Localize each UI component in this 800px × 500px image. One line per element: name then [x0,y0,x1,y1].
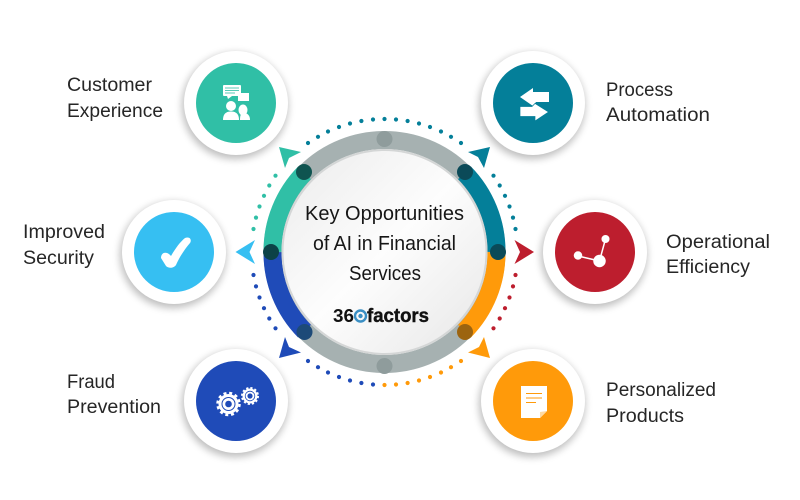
icon: gears [218,388,258,415]
panel: fraud prevention [67,349,288,457]
label: personalized products: Personalized [606,380,716,401]
dotted ring: personalized products [382,359,463,387]
label: operational efficiency: Operational [666,232,770,253]
dotted ring: process automation [382,117,518,231]
logo: 360 factors [333,306,429,327]
dotted ring: operational efficiency [491,273,518,330]
label: improved security: Improved [23,222,105,243]
label: customer experience: Experience [67,101,163,122]
center title: of AI in Financial [313,233,456,255]
arrow: operational efficiency [514,240,534,264]
label: fraud prevention: Prevention [67,397,161,418]
ring segment: process automation [464,173,497,252]
icon: connected nodes [574,236,609,266]
ring segment: customer experience [272,173,304,252]
logo: 360 factors: factors [367,306,429,327]
central hub [263,131,506,374]
label: personalized products: Products [606,406,684,427]
arrow: improved security [236,240,255,264]
label: operational efficiency: Efficiency [666,257,751,278]
center disc [282,149,488,355]
panel: improved security [23,200,226,308]
label: improved security: Security [23,248,95,269]
arrow: process automation [468,147,490,168]
ring segment: fraud prevention [272,252,304,331]
panel: customer experience [67,51,288,159]
label: fraud prevention: Fraud [67,372,115,393]
icon: swap arrows [520,88,549,121]
icon: people with speech bubbles [223,85,250,120]
arrow: personalized products [468,337,490,358]
dotted ring: customer experience top [306,117,375,145]
label: process automation: Automation [606,105,710,126]
ring nodes [263,131,506,374]
arrow: fraud prevention [279,337,301,358]
label: process automation: Process [606,80,673,101]
dotted ring: customer experience [251,174,278,231]
arrow: customer experience [279,147,301,168]
panel: personalized products [479,349,721,457]
ring segment: personalized products [464,252,497,331]
dotted ring: fraud prevention [251,273,375,387]
panel: process automation [479,51,710,159]
label: customer experience: Customer [67,75,153,96]
center title: Services [349,263,421,285]
icon: check mark [161,237,191,268]
panel: operational efficiency [541,200,775,308]
center title: Key Opportunities [305,203,464,225]
logo: 360 factors: 36 [333,306,354,326]
icon: document [521,386,547,418]
